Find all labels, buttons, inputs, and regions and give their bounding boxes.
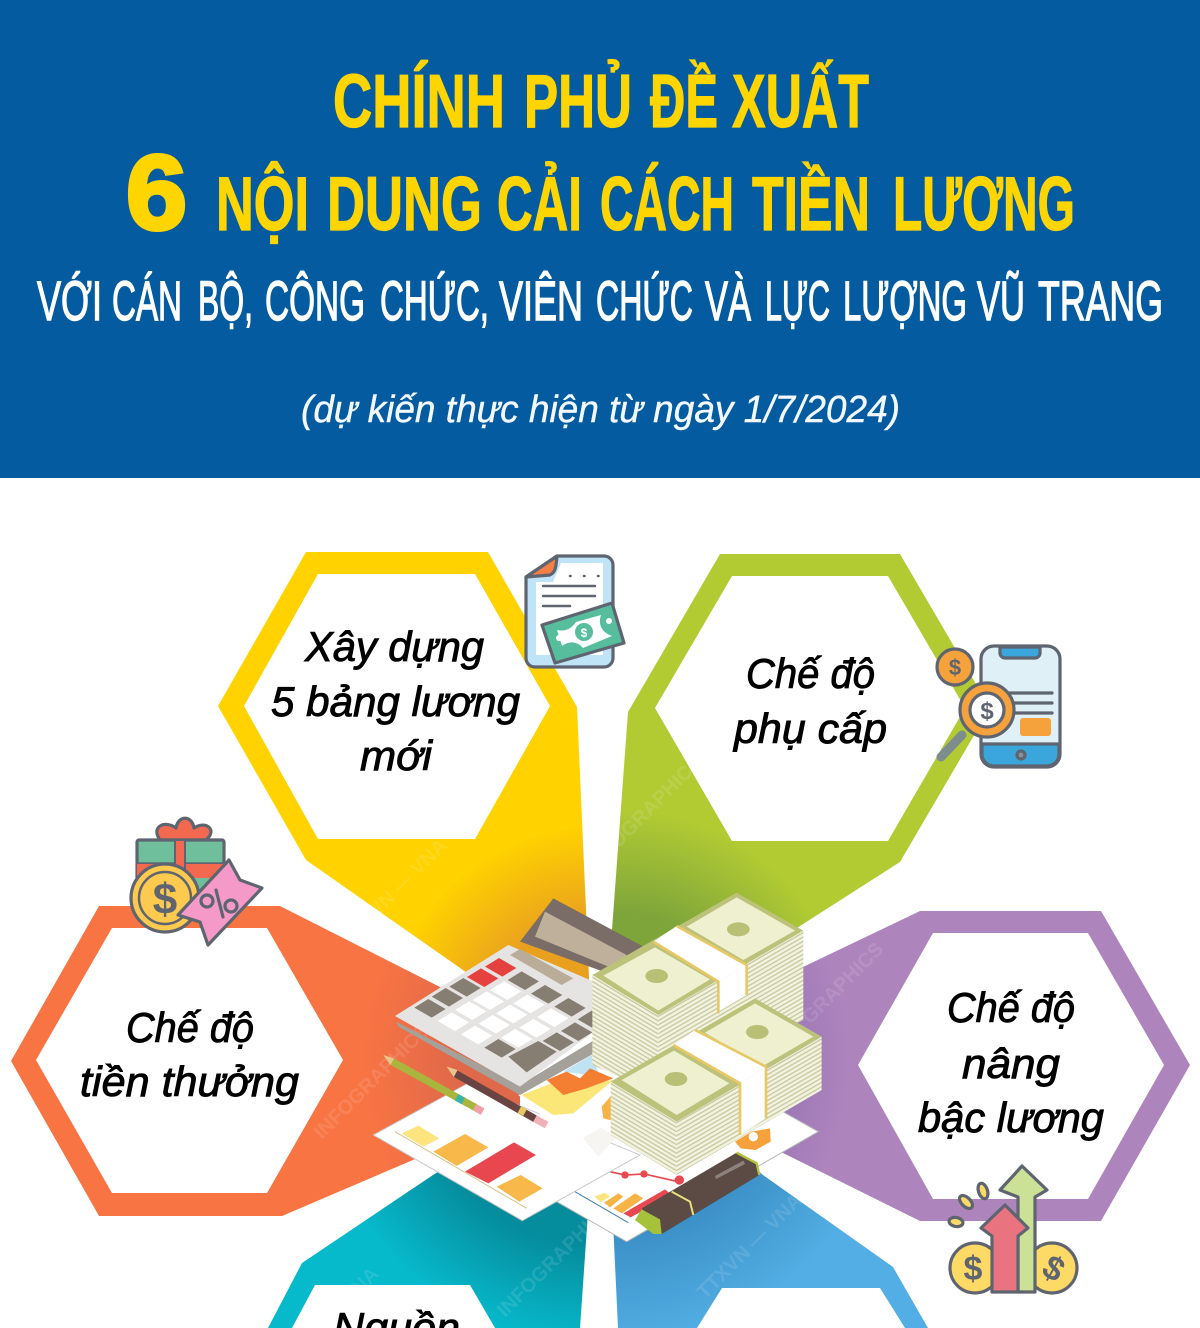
- back chart sheet: [557, 1080, 818, 1242]
- label: allowances: [732, 650, 887, 752]
- subtitle: VIÊN: [499, 269, 583, 332]
- watermarks: TTXVN — VNA: [693, 1190, 807, 1304]
- panel: salary grade raises: [680, 911, 1190, 1221]
- cash stack: front: [611, 998, 822, 1175]
- coin: $: [949, 655, 961, 680]
- date note: (dự kiến thực hiện từ ngày 1/7/2024): [301, 389, 900, 431]
- label: new salary tables: Xây dựng: [304, 623, 484, 670]
- watermarks: INFOGRAPHICS: [583, 752, 707, 876]
- title line 2: LƯƠNG: [893, 162, 1075, 247]
- label: salary grade raises: bậc lương: [918, 1094, 1104, 1141]
- title line 1: PHỦ: [524, 59, 632, 143]
- small coin pills: [948, 1182, 990, 1228]
- title line 2: NỘI: [216, 162, 309, 247]
- green arrow: [1000, 1166, 1047, 1292]
- title line 1: CHÍNH: [333, 59, 505, 143]
- panel: wage management: [612, 1120, 928, 1328]
- panel: bonuses: [11, 906, 520, 1216]
- front chart sheet: [373, 1084, 640, 1221]
- calculator keys: [414, 971, 609, 1072]
- marker pen: [635, 1153, 759, 1234]
- label: bonuses: [80, 1004, 299, 1105]
- subtitle: VÀ: [705, 269, 751, 332]
- subtitle: VŨ: [977, 269, 1025, 332]
- label: allowances: phụ cấp: [732, 705, 887, 752]
- subtitle: CHỨC: [596, 269, 693, 332]
- title line 2: TIỀN: [752, 162, 870, 247]
- red arrow: [981, 1205, 1028, 1292]
- watermarks: [310, 752, 888, 1322]
- cash stack: back: [592, 893, 803, 1093]
- pencil: green: [383, 1055, 483, 1112]
- label: allowances: Chế độ: [746, 650, 875, 697]
- panel: funding sources: [268, 1120, 590, 1328]
- subtitle: [37, 269, 1163, 332]
- red keys: [467, 958, 516, 987]
- subtitle: CÁN: [112, 269, 182, 332]
- coins: $: [964, 1250, 983, 1288]
- subtitle: LƯỢNG: [843, 269, 967, 332]
- title line 1: XUẤT: [732, 59, 869, 143]
- title line 2: CẢI: [497, 162, 582, 247]
- title line 1: ĐỀ: [650, 59, 718, 143]
- label: bonuses: Chế độ: [126, 1004, 254, 1051]
- panel: new salary tables: [218, 552, 590, 1010]
- coin: $: [153, 875, 177, 924]
- subtitle: VỚI: [37, 269, 102, 332]
- subtitle: BỘ,: [198, 269, 253, 332]
- label: new salary tables: 5 bảng lương: [271, 678, 520, 725]
- title line 1: [333, 59, 869, 143]
- icon: rising arrows with coins: [948, 1166, 1077, 1293]
- watermarks: TTXVN — VNA: [338, 835, 452, 949]
- magnifier: $: [980, 698, 994, 725]
- label: new salary tables: [271, 623, 520, 779]
- icon: gift, coin and discount ticket: [131, 818, 262, 945]
- label: bonuses: tiền thưởng: [80, 1058, 299, 1105]
- watermarks: INFOGRAPHICS: [310, 1020, 434, 1144]
- subtitle: LỰC: [765, 269, 830, 332]
- subtitle: CHỨC,: [380, 269, 489, 332]
- coins: [950, 1243, 1077, 1293]
- label: new salary tables: mới: [360, 732, 434, 779]
- icon: salary document with banknote: $: [581, 626, 588, 640]
- panel: allowances: [612, 554, 990, 1000]
- title line 2: DUNG: [327, 162, 482, 247]
- calculator: [395, 898, 647, 1095]
- coins: $: [1036, 1248, 1071, 1290]
- title line 2: CÁCH: [600, 162, 734, 247]
- label: salary grade raises: Chế độ: [947, 984, 1075, 1031]
- pencil: brown: [447, 1067, 547, 1125]
- label: salary grade raises: [918, 984, 1104, 1141]
- watermarks: GRAPHICS: [798, 938, 888, 1029]
- watermarks: VNA: [338, 1263, 383, 1309]
- subtitle: CÔNG: [265, 269, 365, 332]
- icon: salary document with banknote: [526, 556, 624, 667]
- icon: phone with magnifier and coin: [937, 646, 1060, 767]
- watermarks: INFOGRAPHICS: [493, 1198, 617, 1322]
- header band: [0, 0, 1200, 478]
- title line 2: [216, 162, 1075, 247]
- white keys: [438, 981, 568, 1048]
- area chart sheet: [518, 1053, 660, 1143]
- label: salary grade raises: nâng: [962, 1040, 1060, 1087]
- central illustration: calculator, cash and charts: [373, 893, 822, 1242]
- big number 6: 6: [126, 134, 187, 252]
- ticket: [178, 860, 262, 945]
